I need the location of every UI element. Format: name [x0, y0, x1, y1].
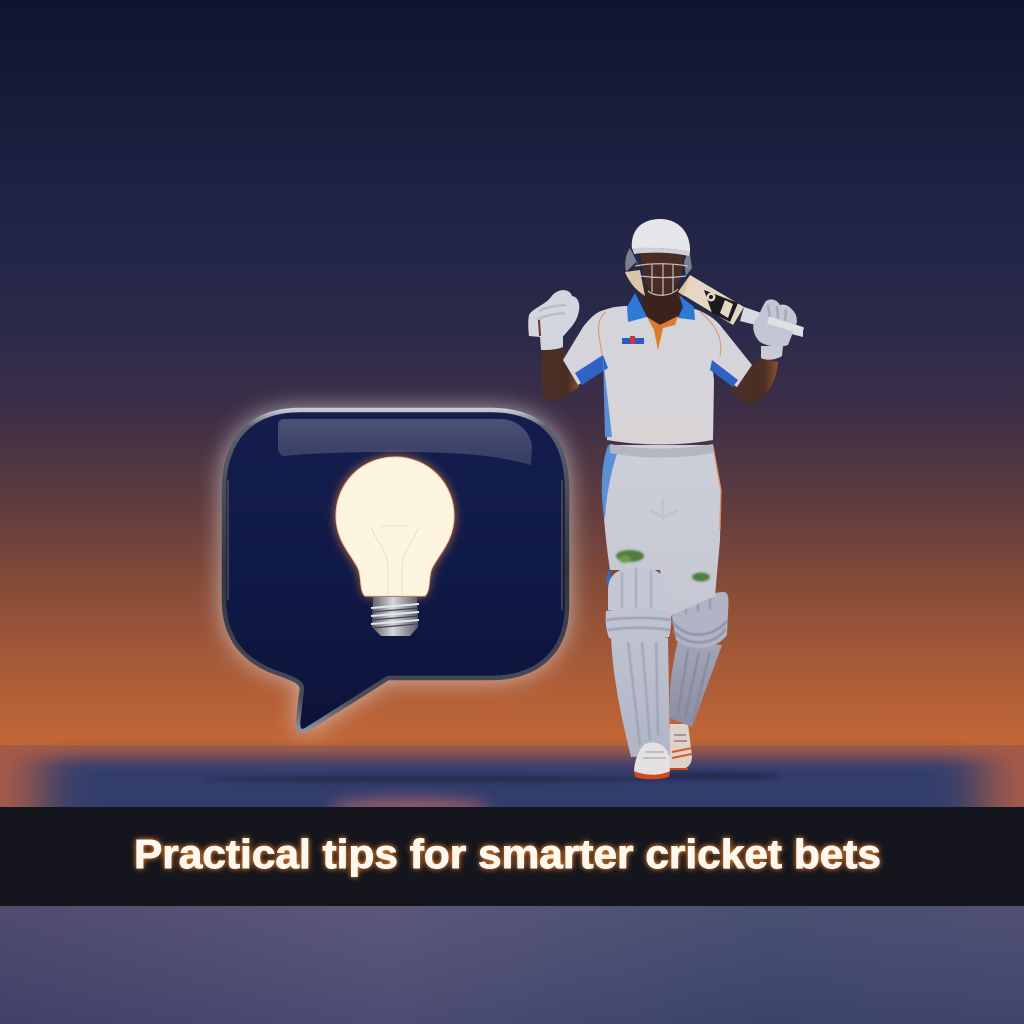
caption bar	[0, 807, 1024, 906]
front pad	[606, 567, 671, 757]
cricket bat	[680, 275, 803, 343]
left arm	[541, 347, 579, 401]
helmet and face	[625, 219, 692, 296]
bubble body	[224, 410, 567, 731]
floor	[0, 744, 1024, 807]
orange placket	[647, 316, 678, 350]
background gradient	[0, 0, 1024, 810]
bulb halo	[336, 457, 454, 596]
neck	[642, 285, 680, 327]
right arm	[731, 358, 778, 404]
cricket player	[528, 219, 803, 779]
trousers	[602, 444, 721, 625]
light bulb glass	[336, 457, 454, 596]
jersey	[563, 293, 752, 444]
front shoe	[634, 742, 670, 779]
bulb filament	[371, 526, 419, 595]
face grille	[635, 263, 688, 296]
bulb screw base	[371, 597, 419, 636]
bubble outer glow	[222, 409, 569, 733]
blue collar right	[678, 295, 695, 320]
rear shoe	[668, 724, 692, 770]
rear pad	[669, 592, 728, 727]
grass stain left	[616, 550, 644, 563]
blue collar left	[627, 293, 647, 322]
caption text: Practical tips for smarter cricket bets	[134, 831, 881, 877]
bubble gold rim line	[228, 480, 562, 610]
lower panel	[0, 906, 1024, 1024]
left glove	[528, 290, 579, 350]
right glove	[753, 299, 803, 360]
grass stain right	[692, 572, 710, 582]
bubble gloss highlight	[278, 419, 532, 465]
speech bubble with light bulb	[222, 409, 569, 733]
caption glow: Practical tips for smarter cricket bets	[134, 831, 881, 877]
team logo	[622, 336, 644, 344]
